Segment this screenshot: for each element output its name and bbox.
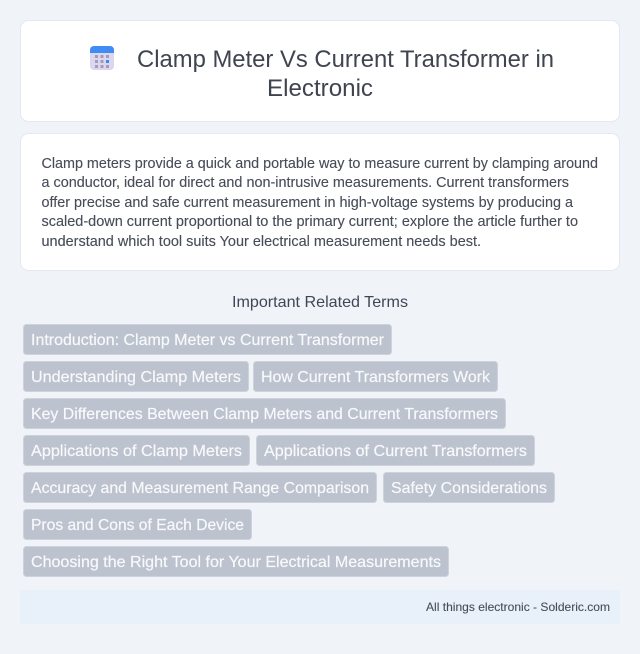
tag: choosing the right tool: Choosing the Right Tool for Your Electrical Measurements — [31, 554, 441, 571]
tag: applications of clamp meters — [24, 436, 250, 466]
summary paragraph: a conductor, ideal for direct and non-intrusive measurements. Current transformers — [42, 175, 569, 191]
tag: safety considerations: Safety Considerations — [391, 480, 547, 497]
footer: All things electronic - Solderic.com — [426, 600, 610, 614]
tag: accuracy comparison — [24, 472, 376, 502]
summary paragraph: understand which tool suits Your electrical measurement needs best. — [42, 234, 481, 250]
tag: key differences — [24, 398, 506, 428]
tag: pros and cons — [24, 510, 252, 540]
heading: important related terms: Important Related Terms — [232, 294, 408, 311]
tag: applications of clamp meters: Applications of Clamp Meters — [31, 443, 242, 460]
summary paragraph: offer precise and safe current measurement in high-voltage systems by producing a — [42, 195, 573, 211]
footer — [20, 590, 620, 624]
tag: key differences: Key Differences Between Clamp Meters and Current Transformers — [31, 406, 498, 423]
title: Clamp Meter Vs Current Transformer in — [137, 46, 554, 73]
icon: calendar — [90, 46, 114, 70]
tag: pros and cons: Pros and Cons of Each Device — [31, 517, 244, 534]
tag: understanding clamp meters: Understanding Clamp Meters — [31, 369, 241, 386]
tag: introduction: Introduction: Clamp Meter vs Current Transformer — [31, 332, 385, 349]
summary paragraph — [42, 156, 598, 250]
tag: how current transformers work: How Current Transformers Work — [261, 369, 491, 386]
panel: title header — [20, 20, 620, 122]
tag: understanding clamp meters — [24, 362, 248, 392]
tag: choosing the right tool — [24, 546, 448, 576]
tag: applications of current transformers — [256, 436, 534, 466]
tag: safety considerations — [384, 472, 554, 502]
title — [137, 46, 554, 102]
tag: accuracy comparison: Accuracy and Measurement Range Comparison — [31, 480, 369, 497]
panel: summary text — [20, 134, 620, 270]
summary paragraph: scaled-down current proportional to the primary current; explore the article further to — [42, 214, 578, 230]
title: Electronic — [267, 75, 373, 102]
summary paragraph: Clamp meters provide a quick and portable way to measure current by clamping around — [42, 156, 598, 172]
tag: how current transformers work — [254, 362, 498, 392]
tag: introduction — [24, 324, 392, 354]
tag: applications of current transformers: Applications of Current Transformers — [264, 443, 527, 460]
